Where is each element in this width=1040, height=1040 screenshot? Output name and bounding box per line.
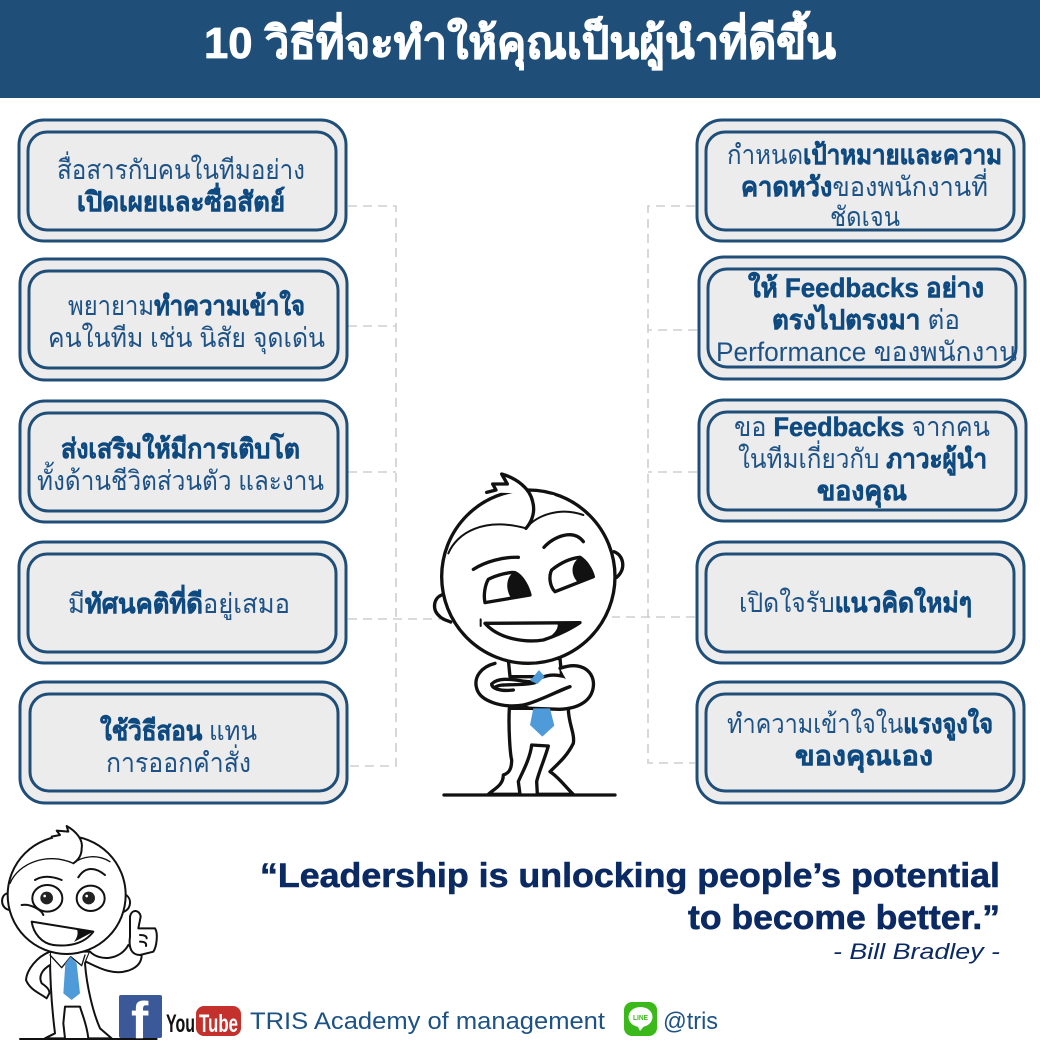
icon: line xyxy=(624,1002,657,1036)
icon: youtube: You xyxy=(166,1010,195,1038)
panel: left tip 4 xyxy=(19,542,346,663)
panel: left tip 1: สื่อสารกับคนในทีมอย่าง xyxy=(57,151,305,185)
title: 10 วิธีที่จะทำให้คุณเป็นผู้นำที่ดีขึ้น xyxy=(204,10,836,71)
icon: facebook xyxy=(119,992,162,1040)
brand name: TRIS Academy of management xyxy=(250,1008,605,1035)
icon: youtube: Tube xyxy=(199,1010,238,1038)
panel: left tip 5 xyxy=(20,682,347,803)
panel: right tip 3: ของคุณ xyxy=(817,476,907,508)
panel: left tip 3: ส่งเสริมให้มีการเติบโต xyxy=(61,432,300,464)
panel: left tip 5: การออกคำสั่ง xyxy=(106,744,251,778)
panel: right tip 3 xyxy=(699,400,1026,521)
panel: right tip 3: ในทีมเกี่ยวกับ ภาวะผู้นำ xyxy=(738,440,987,476)
panel: right tip 5: ของคุณเอง xyxy=(795,741,933,773)
panel: right tip 2 xyxy=(699,257,1025,379)
panel: left tip 2 xyxy=(20,259,347,380)
panel: right tip 3: ขอ Feedbacks จากคน xyxy=(734,412,990,442)
panel: left tip 3: ทั้งด้านชีวิตส่วนตัว และงาน xyxy=(37,461,324,496)
panel: right tip 5: ทำความเข้าใจในแรงจูงใจ xyxy=(727,708,993,741)
illustration: cartoon leader thumbs up xyxy=(2,826,157,1039)
icon: youtube xyxy=(166,1006,241,1038)
panel: right tip 2: ตรงไปตรงมา ต่อ xyxy=(772,304,960,335)
quote: to become better.” xyxy=(688,899,1000,937)
line handle: @tris xyxy=(663,1008,718,1035)
quote: “Leadership is unlocking people’s potential xyxy=(260,857,1000,895)
panel: left tip 5: ใช้วิธีสอน แทน xyxy=(100,715,257,746)
panel: left tip 1: เปิดเผยและซื่อสัตย์ xyxy=(77,182,285,217)
panel: right tip 1: คาดหวังของพนักงานที่ xyxy=(741,168,988,202)
panel: left tip 2: คนในทีม เช่น นิสัย จุดเด่น xyxy=(48,322,325,355)
panel: right tip 4: เปิดใจรับแนวคิดใหม่ๆ xyxy=(739,587,972,618)
quote attribution: - Bill Bradley - xyxy=(833,939,1000,964)
panel: right tip 5 xyxy=(697,682,1024,803)
panel: right tip 2: Performance ของพนักงาน xyxy=(716,337,1017,367)
panel: right tip 1: ชัดเจน xyxy=(830,202,900,232)
panel: right tip 2: ให้ Feedbacks อย่าง xyxy=(748,272,984,303)
illustration: cartoon leader with crossed arms xyxy=(435,474,623,795)
panel: right tip 1: กำหนดเป้าหมายและความ xyxy=(727,140,1002,170)
panel: left tip 2: พยายามทำความเข้าใจ xyxy=(68,290,305,321)
panel: left tip 3 xyxy=(20,401,347,522)
header banner xyxy=(0,0,1040,98)
quote xyxy=(260,857,1000,964)
panel: right tip 1 xyxy=(697,120,1024,241)
panel: left tip 1 xyxy=(19,120,346,241)
icon: line: LINE xyxy=(633,1015,648,1022)
panel: left tip 4: มีทัศนคติที่ดีอยู่เสมอ xyxy=(68,584,290,620)
panel: right tip 4 xyxy=(697,542,1024,663)
